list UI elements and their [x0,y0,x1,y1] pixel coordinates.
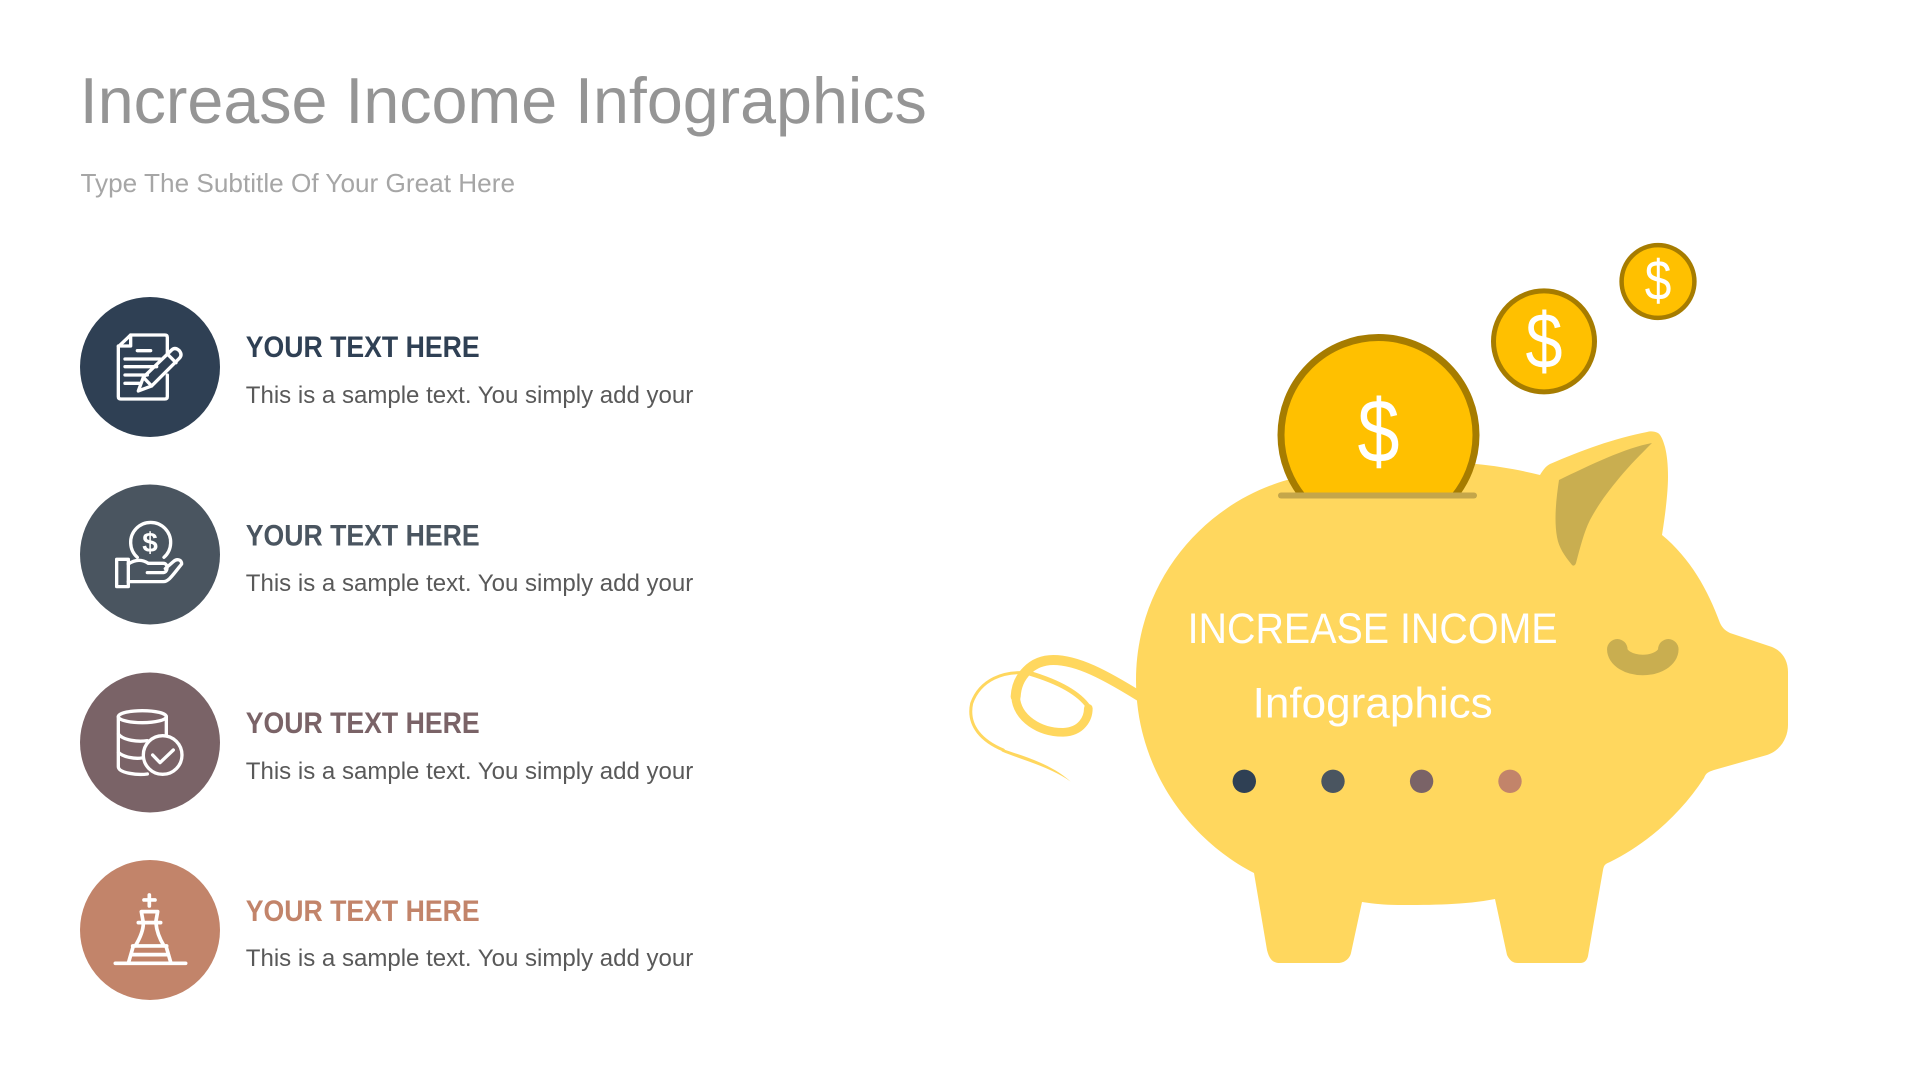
item 1 heading: YOUR TEXT HERE [246,331,480,364]
large coin dollar sign: $ [1358,382,1400,482]
item 2 [80,484,693,624]
pig label line 1: INCREASE INCOME [1188,605,1558,653]
icon: dollar sign: $ [142,527,158,558]
small coin [1622,245,1694,318]
medium coin dollar sign: $ [1526,296,1562,385]
pig body [1136,431,1788,963]
pig label line 2: Infographics [1253,679,1493,727]
dot 1 [1233,770,1256,793]
subtitle: Type The Subtitle Of Your Great Here [80,168,515,198]
item 3 circle [80,672,220,812]
title: Increase Income Infographics [80,64,927,137]
coin slot [1278,492,1477,498]
item 2 heading: YOUR TEXT HERE [246,520,480,552]
item 4 heading: YOUR TEXT HERE [246,895,480,928]
dot 4 [1498,770,1522,793]
pig eye [1617,649,1668,665]
item 3 heading: YOUR TEXT HERE [246,707,480,740]
dot 3 [1410,770,1433,793]
icon: document and pencil [118,335,181,399]
item 1 circle [80,297,220,437]
item 4 [80,860,693,1000]
icon: hand holding coin [117,522,182,587]
item 2 body: This is a sample text. You simply add your [246,570,693,597]
medium coin [1494,291,1594,392]
pig inner ear [1556,443,1652,566]
item 4 circle [80,860,220,1000]
small coin dollar sign: $ [1645,249,1671,313]
item 3 [80,672,693,812]
item 1 body: This is a sample text. You simply add your [246,382,693,409]
icon: database with check [118,711,182,774]
piggy bank illustration [971,245,1788,963]
item 4 body: This is a sample text. You simply add your [246,945,693,972]
item 3 body: This is a sample text. You simply add your [246,758,693,785]
large coin [1278,334,1480,492]
item 1 [80,297,693,437]
icon: chess king [115,895,186,963]
pig tail [971,660,1147,782]
item 2 circle [80,484,220,624]
dot 2 [1321,770,1345,793]
